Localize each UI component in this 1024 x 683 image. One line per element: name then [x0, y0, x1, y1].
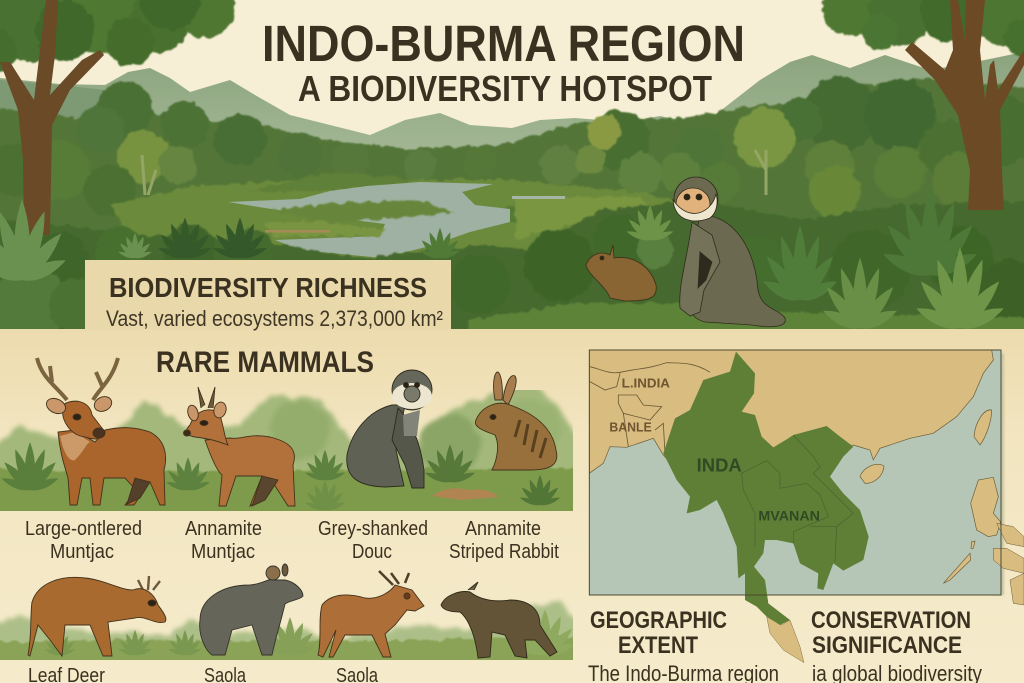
panel: biodiversity richness [85, 260, 451, 331]
foreground plants [0, 189, 1005, 334]
mammal labels: top row: Grey-shanked [318, 518, 428, 540]
map lower peninsula [767, 617, 804, 663]
animal: leaf deer [28, 576, 166, 656]
title [262, 15, 745, 109]
map frame [589, 350, 1001, 595]
mountains [0, 54, 1024, 151]
mammal labels: top row: Large-ontlered [25, 518, 142, 540]
mammal labels: top row: Annamite [185, 518, 262, 540]
animal: grey-shanked douc [347, 370, 432, 488]
scene: bottom row habitat [0, 598, 573, 660]
text block: conservation significance: CONSERVATION [811, 607, 971, 634]
title: INDO-BURMA REGION [262, 15, 745, 72]
hero rabbit [586, 245, 656, 301]
tree: left [0, 0, 235, 235]
map country borders [742, 435, 853, 562]
map label: mvanan: MVANAN [758, 508, 820, 524]
mammal labels: bottom row [28, 665, 379, 683]
mammal labels: top row: Muntjac [50, 541, 114, 563]
scene: top row habitat [0, 390, 573, 511]
text block: conservation significance: SIGNIFICANCE [812, 632, 962, 659]
map [589, 350, 1024, 663]
heading: BIODIVERSITY RICHNESS [109, 272, 427, 303]
map highlighted indo-burma region [663, 352, 869, 625]
text block: geographic extent [588, 607, 779, 683]
animal: annamite striped rabbit [475, 372, 557, 470]
body text: Vast, varied ecosystems 2,373,000 km² [106, 306, 443, 331]
map islands [860, 410, 1001, 583]
subtitle: A BIODIVERSITY HOTSPOT [298, 68, 712, 109]
lighter trees [0, 106, 988, 218]
mammal labels: top row: Striped Rabbit [449, 541, 559, 563]
far forest [0, 74, 1024, 232]
text block: conservation significance [811, 607, 982, 683]
text block: geographic extent: GEOGRAPHIC [590, 607, 727, 634]
map label: india: L.INDIA [622, 376, 670, 391]
animal: saola dark [441, 582, 557, 658]
mammal labels: top row: Annamite [465, 518, 541, 540]
tree: right [822, 0, 1024, 210]
animal: annamite muntjac [184, 387, 295, 506]
map label: banle: BANLE [609, 420, 652, 435]
animal: saola grey [200, 564, 303, 655]
map label: inda: INDA [697, 455, 742, 476]
heading: rare mammals: RARE MAMMALS [156, 346, 374, 379]
river channel strip [512, 196, 565, 199]
hero monkey [673, 177, 785, 327]
animal: saola brown [318, 571, 424, 657]
lower page background [0, 329, 1024, 683]
map land: neighbouring countries [589, 350, 993, 473]
river [228, 182, 510, 258]
map islands: philippines south [993, 523, 1024, 605]
mammal labels: top row [25, 518, 559, 563]
river islands [265, 200, 455, 236]
meadow [110, 172, 690, 265]
text block: geographic extent: EXTENT [618, 632, 698, 659]
panel: landscape hero [0, 0, 1024, 350]
mammal labels: top row: Douc [352, 541, 392, 563]
animal: large-antlered muntjac [37, 358, 166, 505]
foreground vegetation [0, 200, 1024, 329]
mammal labels: top row: Muntjac [191, 541, 255, 563]
map sea [589, 350, 1001, 595]
